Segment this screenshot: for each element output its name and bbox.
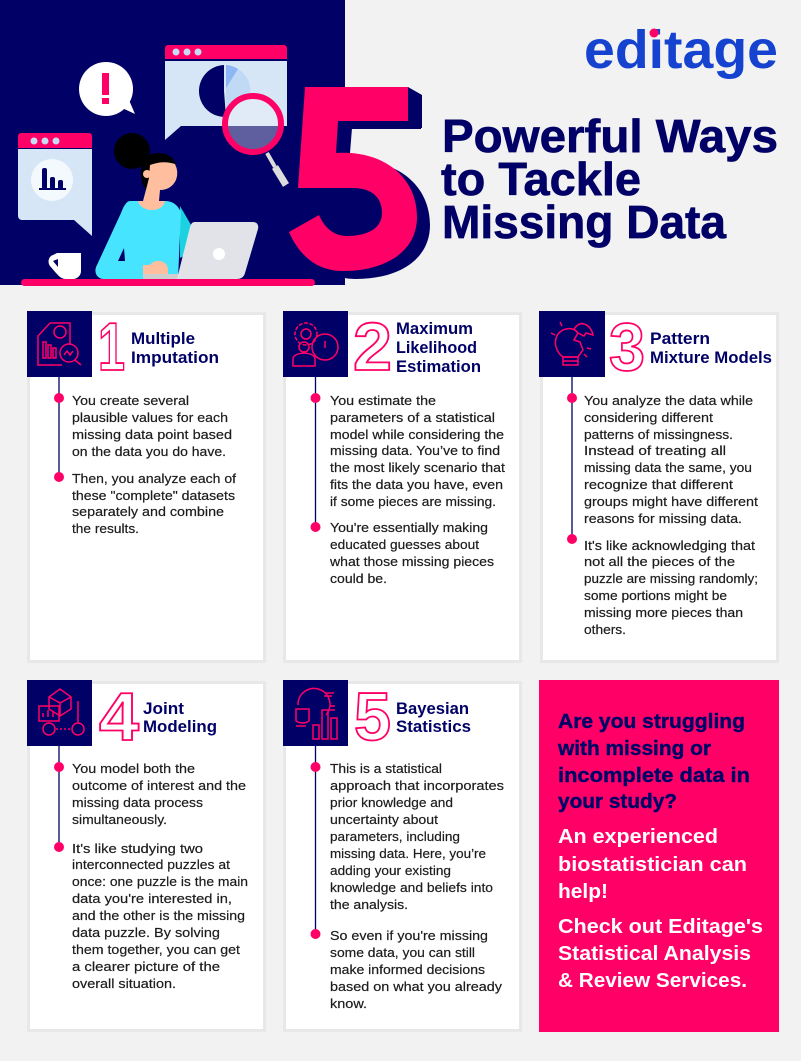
body text: knowledge and beliefs into — [330, 880, 493, 895]
body text: on the data you do have. — [72, 444, 226, 459]
heading: Modeling — [143, 717, 217, 736]
heading: Estimation — [396, 357, 481, 376]
body text: the analysis. — [330, 897, 408, 912]
panel: 4 Joint Modeling — [27, 679, 264, 1030]
body text: uncertainty about — [330, 812, 438, 827]
body text: prior knowledge and — [330, 795, 453, 810]
title: to Tackle — [441, 153, 641, 205]
body text: outcome of interest and the — [72, 778, 246, 793]
body text — [329, 393, 505, 586]
icon: document with chart and magnifier — [38, 323, 81, 365]
body text: not all the pieces of the — [584, 554, 735, 569]
body text: Then, you analyze each of — [72, 471, 236, 486]
body text: educated guesses about — [330, 537, 479, 552]
body text: parameters of a statistical — [330, 410, 495, 425]
heading — [396, 699, 471, 736]
body text: make informed decisions — [330, 962, 485, 977]
body text: some portions might be — [584, 588, 727, 603]
panel: 5 Bayesian Statistics — [283, 679, 520, 1030]
body text: could be. — [330, 571, 387, 586]
timeline — [567, 377, 577, 544]
icon: bar chart window — [18, 133, 92, 236]
icon: puzzle light bulb — [551, 322, 593, 365]
body text: parameters, including — [330, 829, 460, 844]
services text — [558, 916, 763, 992]
body text: approach that incorporates — [330, 778, 504, 793]
body text: the results. — [72, 521, 139, 536]
numeral 2: 2 — [353, 309, 392, 385]
body text: You model both the — [72, 761, 195, 776]
services text: & Review Services. — [558, 970, 747, 992]
body text: reasons for missing data. — [584, 511, 742, 526]
body text — [72, 761, 248, 991]
big numeral 5 — [289, 87, 430, 279]
body text: missing data. Here, you’re — [330, 846, 486, 861]
body text: You create several — [72, 393, 189, 408]
services text: Statistical Analysis — [558, 943, 751, 965]
heading: Imputation — [131, 348, 219, 367]
help text — [558, 826, 747, 903]
body text — [584, 393, 758, 637]
body text: separately and combine — [72, 504, 224, 519]
timeline — [54, 377, 64, 482]
body text: based on what you already — [330, 979, 502, 994]
services text: Check out Editage's — [558, 916, 763, 938]
body text: So even if you're missing — [330, 928, 488, 943]
body text: It's like acknowledging that — [584, 538, 755, 553]
body text: others. — [584, 622, 626, 637]
header illustration panel — [0, 0, 345, 286]
timeline — [310, 746, 320, 939]
body text: if some pieces are missing. — [330, 494, 496, 509]
question text: your study? — [558, 791, 677, 813]
body text: considering different — [584, 410, 713, 425]
body text: recognize that different — [584, 477, 733, 492]
heading: Likelihood — [396, 338, 477, 357]
numeral 3: 3 — [609, 309, 645, 385]
body text: missing data the same, you — [584, 460, 752, 475]
panel: 3 Pattern Mixture Models — [539, 309, 778, 662]
body text: and the other is the missing — [72, 908, 245, 923]
icon: coffee cup — [49, 253, 81, 279]
question text: with missing or — [557, 738, 711, 760]
body text: model while considering the — [330, 427, 504, 442]
body text: missing data. You’ve to find — [330, 443, 500, 458]
body text: This is a statistical — [330, 761, 442, 776]
body text: You analyze the data while — [584, 393, 753, 408]
panel: 1 Multiple Imputation — [27, 309, 264, 662]
body text: some data, you can still — [330, 945, 475, 960]
body text: You're essentially making — [330, 520, 488, 535]
icon: person with gear and clock — [293, 323, 338, 366]
body text: interconnected puzzles at — [72, 857, 230, 872]
icon: magnifying glass — [225, 96, 286, 185]
heading — [143, 699, 217, 736]
body text: adding your existing — [330, 863, 451, 878]
numeral 4: 4 — [99, 679, 139, 755]
body text: them together, you can get — [72, 942, 240, 957]
body text: missing data process — [72, 795, 203, 810]
body text: data you're interested in, — [72, 891, 232, 906]
heading: Bayesian — [396, 699, 469, 718]
body text: fits the data you have, even — [330, 477, 503, 492]
body text: overall situation. — [72, 976, 176, 991]
numeral 5: 5 — [354, 679, 391, 755]
icon: cube workflow — [39, 689, 84, 735]
question text — [557, 711, 750, 813]
heading: Pattern — [650, 329, 710, 348]
body text: missing more pieces than — [584, 605, 743, 620]
title: Powerful Ways — [442, 110, 778, 162]
woman at laptop — [95, 133, 194, 280]
help text: help! — [558, 881, 608, 903]
heading: Joint — [143, 699, 184, 718]
help text: biostatistician can — [558, 854, 747, 876]
body text: what those missing pieces — [329, 554, 494, 569]
logo: editage: editage — [584, 20, 778, 80]
body text: the most likely scenario that — [330, 460, 505, 475]
title — [441, 110, 778, 248]
question text: incomplete data in — [558, 765, 750, 787]
body text: groups might have different — [584, 494, 758, 509]
body text: data puzzle. By solving — [72, 925, 220, 940]
body text: know. — [330, 996, 367, 1011]
heading: Statistics — [396, 717, 471, 736]
body text — [330, 761, 504, 1011]
heading — [396, 319, 481, 376]
laptop — [177, 222, 258, 279]
body text: It's like studying two — [72, 841, 203, 856]
body text: a clearer picture of the — [72, 959, 220, 974]
body text: once: one puzzle is the main — [72, 874, 248, 889]
numeral 1: 1 — [98, 309, 125, 385]
icon: exclamation speech bubble — [79, 62, 135, 116]
body text: patterns of missingness. — [584, 427, 733, 442]
heading: Mixture Models — [650, 348, 772, 367]
body text: puzzle are missing randomly; — [584, 571, 758, 586]
help text: An experienced — [558, 826, 718, 848]
timeline — [54, 746, 64, 852]
body text: Instead of treating all — [584, 443, 726, 458]
panel: 2 Maximum Likelihood Estimation — [283, 309, 520, 662]
heading — [131, 329, 219, 367]
body text: You estimate the — [330, 393, 436, 408]
body text: these "complete" datasets — [72, 488, 235, 503]
icon: pie chart window — [165, 45, 287, 140]
heading — [650, 329, 772, 367]
body text — [72, 393, 236, 536]
title: Missing Data — [442, 196, 726, 248]
icon: statistics chart — [296, 688, 337, 739]
timeline — [310, 377, 320, 532]
panel: call to action — [539, 680, 779, 1032]
heading: Multiple — [131, 329, 195, 348]
body text: simultaneously. — [72, 812, 167, 827]
body text: missing data point based — [72, 427, 232, 442]
heading: Maximum — [396, 319, 473, 338]
body text: plausible values for each — [72, 410, 228, 425]
question text: Are you struggling — [558, 711, 745, 733]
